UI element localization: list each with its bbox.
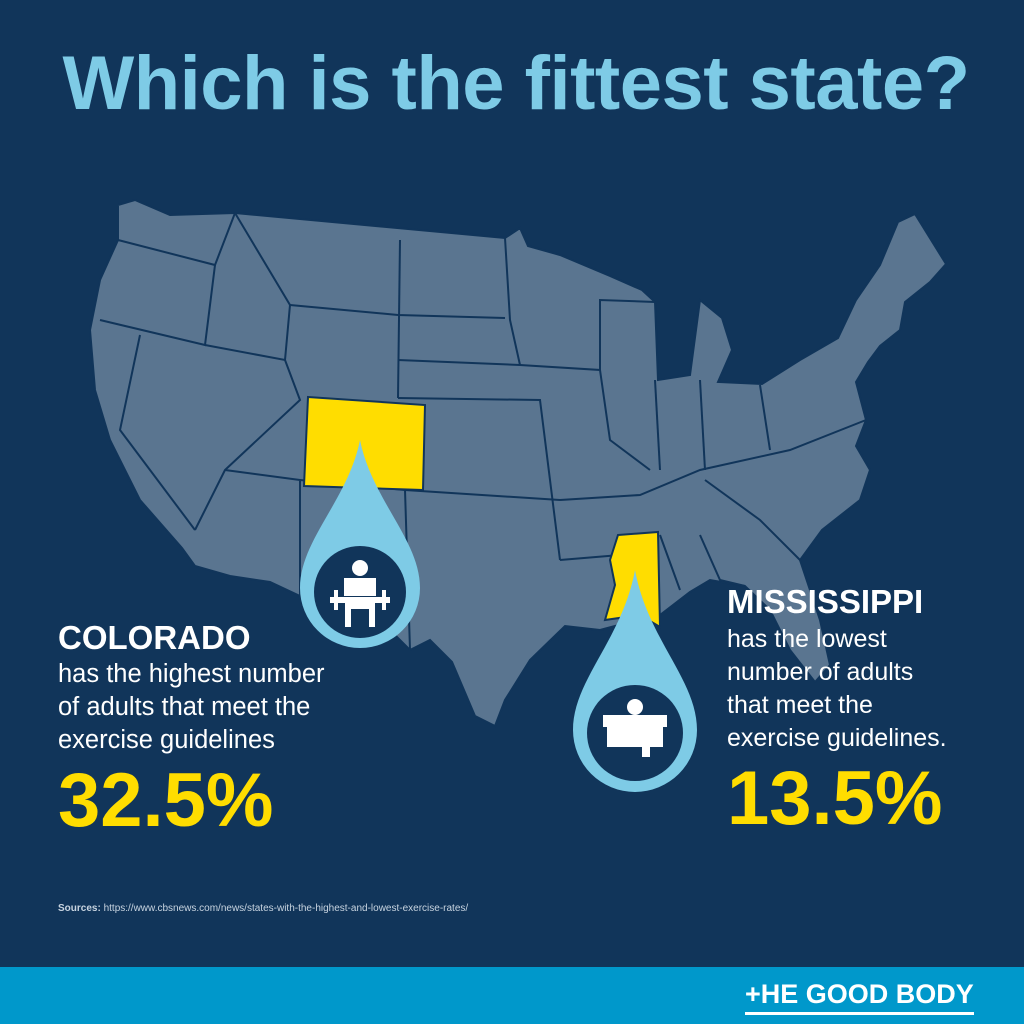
text: colorado: COLORADO [58,619,250,656]
text: mississippi: 13.5% [727,756,942,841]
pin: mississippi [573,570,697,792]
footer [0,967,1024,1024]
text: colorado: exercise guidelines [58,726,275,754]
title: Which is the fittest state? [62,41,970,126]
text: colorado [58,619,325,843]
text: mississippi: exercise guidelines. [727,724,947,752]
logo: +HE GOOD BODY [745,979,974,1009]
text: mississippi: MISSISSIPPI [727,583,923,620]
pin: colorado [300,440,420,648]
text: mississippi: that meet the [727,691,873,719]
text: colorado: of adults that meet the [58,693,310,721]
text: colorado: 32.5% [58,758,274,843]
text: mississippi: number of adults [727,658,913,686]
text: mississippi: has the lowest [727,625,887,653]
mississippi highlight [605,532,660,627]
text: colorado: has the highest number [58,660,325,688]
colorado highlight [304,397,425,490]
sources: Sources: https://www.cbsnews.com/news/states-with-the-highest-and-lowest-exercise-rates/ [58,903,468,914]
text: mississippi [727,583,947,841]
